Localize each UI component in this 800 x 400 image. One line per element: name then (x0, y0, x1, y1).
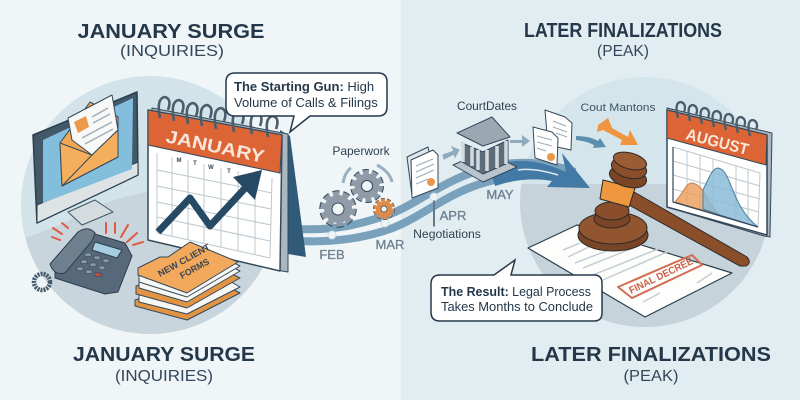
icon: January calendar (148, 97, 306, 272)
left background panel (0, 0, 401, 400)
document: final decree (528, 225, 732, 317)
month labels: FEB (319, 247, 345, 262)
label: Negotiations: Negotiations (413, 227, 481, 241)
icon: stacked documents (533, 110, 572, 165)
callout: the starting gun (226, 73, 387, 132)
gavel base (578, 219, 648, 251)
title: Later finalizations bottom (531, 344, 771, 385)
arrow: blue (576, 136, 606, 148)
month labels: MAY (486, 187, 514, 202)
label: Paperwork: Paperwork (332, 144, 391, 158)
icon: computer monitor (33, 92, 138, 225)
right scene circle (520, 77, 765, 327)
callout: the starting gun: The Starting Gun: High (234, 79, 374, 94)
stamp: FINAL DECREE (627, 256, 696, 297)
icon: process arrows (343, 165, 392, 183)
icon: January calendar: M (176, 158, 182, 164)
title: January surge top: JANUARY SURGE (78, 21, 264, 43)
title: Later finalizations top: (PEAK) (597, 43, 649, 60)
callout: the result: The Result: Legal Process (441, 285, 591, 299)
August calendar rings (677, 102, 757, 136)
month labels (319, 187, 514, 262)
calendar stand (280, 130, 306, 257)
icon: new client folders: FORMS (178, 256, 211, 281)
icon: gears (323, 172, 392, 224)
title: January surge bottom: (INQUIRIES) (115, 368, 213, 385)
gavel handle (629, 192, 749, 266)
arrow: documents to courthouse (443, 147, 459, 159)
label: Court Dates: CourtDates (457, 99, 517, 113)
calendar grid (157, 153, 272, 258)
gavel head (600, 180, 635, 207)
icon: negotiation documents (407, 147, 438, 198)
icon: new client folders (135, 242, 240, 320)
title: Later finalizations bottom: LATER FINALIZATIONS (531, 344, 771, 366)
month labels: APR (440, 208, 466, 223)
calendar rings (159, 97, 277, 137)
icon: August calendar: AUGUST (684, 126, 750, 159)
icon: desk phone (34, 229, 132, 294)
left scene circle (21, 76, 263, 334)
timeline ribbon (298, 153, 590, 241)
title: January surge top: (INQUIRIES) (120, 43, 224, 60)
trend arrow (158, 185, 248, 232)
arrow: courthouse to documents (510, 135, 530, 147)
callout: the result: Takes Months to Conclude (441, 300, 593, 314)
icon: phone ringing lines (52, 223, 143, 245)
icon: August calendar (667, 102, 772, 237)
chart: overlapping curves (673, 147, 760, 227)
month labels: MAR (376, 237, 404, 252)
title: January surge top (78, 21, 264, 60)
title: Later finalizations top: LATER FINALIZATIONS (524, 20, 722, 42)
icon: courthouse (453, 117, 517, 182)
title: January surge bottom (73, 344, 255, 385)
icon: gavel (578, 149, 749, 266)
arrow: orange (597, 118, 638, 145)
icon: envelope with letter (60, 95, 118, 186)
label: Cout Mantons: Cout Mantons (580, 102, 656, 114)
icon: January calendar: T (227, 169, 231, 175)
timeline milestone dots (328, 193, 438, 239)
icon: January calendar: JANUARY (164, 126, 266, 167)
title: Later finalizations top (524, 20, 722, 60)
icon: January calendar: T (193, 161, 197, 167)
callout: the result (431, 260, 602, 321)
icon: new client folders: NEW CLIENT (156, 242, 212, 279)
title: January surge bottom: JANUARY SURGE (73, 344, 255, 366)
right background panel (401, 0, 800, 400)
icon: January calendar: W (208, 165, 214, 171)
title: Later finalizations bottom: (PEAK) (624, 368, 678, 385)
callout: the starting gun: Volume of Calls & Filings (234, 95, 378, 110)
